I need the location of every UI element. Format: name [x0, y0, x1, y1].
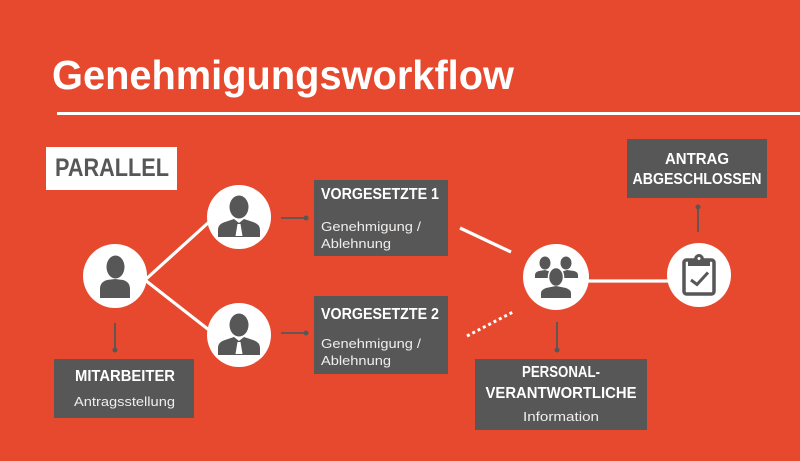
box: supervisor 1 [314, 180, 448, 256]
supervisor node 2 [207, 303, 271, 367]
supervisor node 1 [207, 185, 271, 249]
box: HR: VERANTWORTLICHE [486, 385, 636, 402]
box: employee: Antragsstellung [74, 394, 175, 409]
employee node [83, 244, 147, 308]
box: request completed [627, 139, 767, 198]
connector lines [145, 222, 668, 336]
box: HR: PERSONAL- [522, 364, 600, 381]
box: employee [54, 359, 194, 418]
HR group node [523, 244, 589, 310]
box: HR [475, 359, 647, 430]
checklist node [667, 243, 731, 307]
connector: employee to box [112, 323, 118, 352]
box: supervisor 2: Ablehnung [321, 353, 391, 368]
box: supervisor 2: Genehmigung / [321, 336, 421, 351]
connector: check to box [696, 204, 700, 232]
box: request completed: ANTRAG [665, 151, 729, 168]
connector: supervisor 1 to box [281, 216, 308, 220]
box: supervisor 2: VORGESETZTE 2 [321, 306, 439, 323]
box: request completed: ABGESCHLOSSEN [632, 171, 762, 188]
label: parallel [46, 147, 177, 190]
box: HR: Information [523, 409, 599, 424]
connector: supervisor 2 to box [281, 330, 308, 336]
box: supervisor 1: VORGESETZTE 1 [321, 186, 439, 203]
box: supervisor 1: Ablehnung [321, 236, 391, 251]
label: parallel: PARALLEL [55, 154, 169, 182]
box: supervisor 2 [314, 296, 448, 374]
connector: HR to box [554, 322, 560, 352]
box: employee: MITARBEITER [75, 368, 175, 385]
box: supervisor 1: Genehmigung / [321, 219, 421, 234]
title: Genehmigungsworkflow [52, 52, 514, 98]
